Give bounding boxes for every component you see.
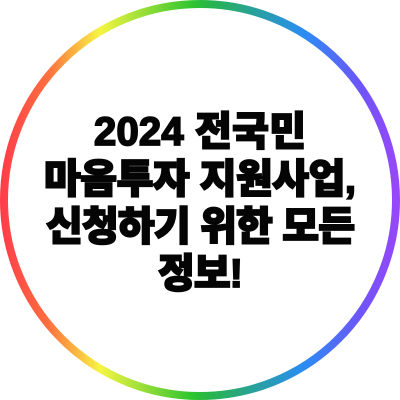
title: 2024 전국민 (94, 110, 306, 154)
title (44, 110, 356, 296)
title: 마음투자 지원사업, (44, 158, 356, 202)
title: 정보! (158, 252, 243, 296)
title: 신청하기 위한 모든 (46, 205, 355, 249)
